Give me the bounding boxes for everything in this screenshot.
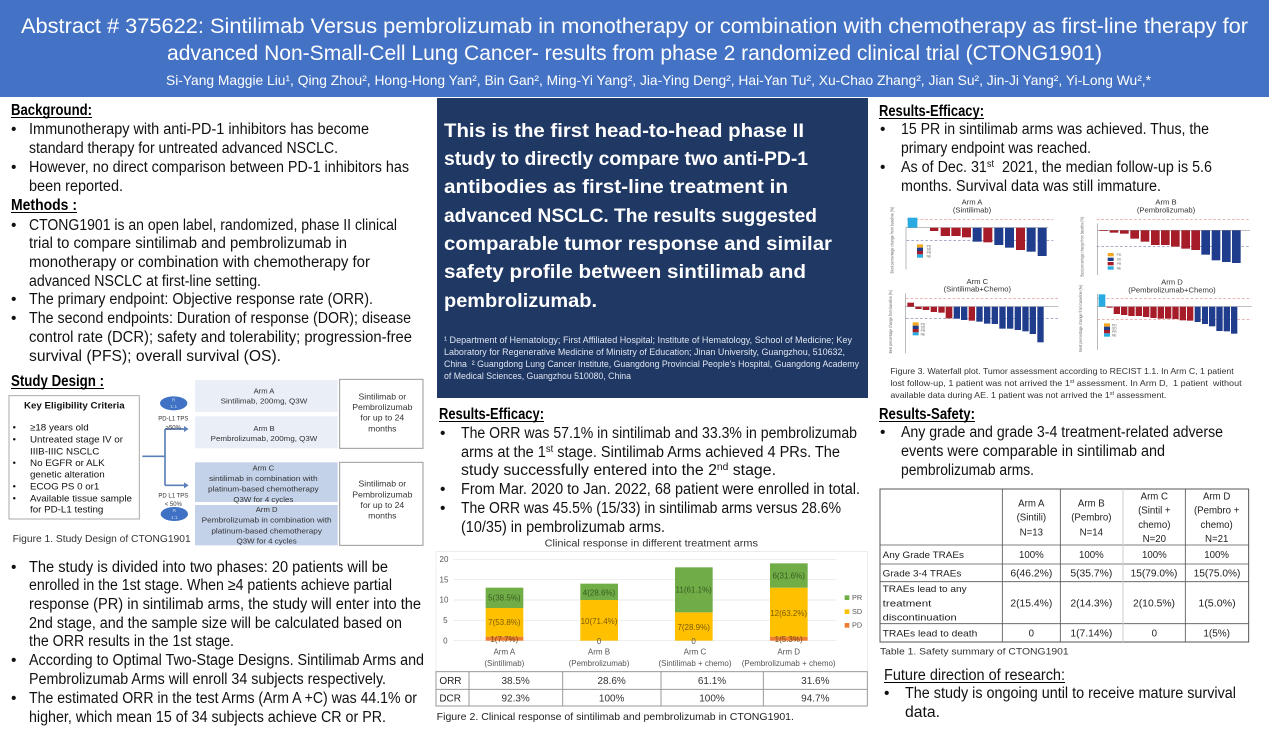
eligibility criteria box: • bbox=[13, 423, 16, 433]
text block: study phases: 2nd stage, and the sample size will be calculated based on bbox=[29, 615, 402, 632]
text block: study phases: According to Optimal Two-Stage Designs. Sintilimab Arms and bbox=[29, 652, 424, 669]
bar: arm B: Arm B bbox=[588, 648, 610, 657]
table header: (Sintil + bbox=[1138, 505, 1171, 516]
row: death: 1(5%) bbox=[1203, 628, 1230, 639]
arm C box: platinum-based chemotherapy bbox=[208, 485, 319, 494]
text block: results safety: Any grade and grade 3-4 treatment-related adverse bbox=[901, 424, 1223, 441]
waterfall: arm B: PR bbox=[1117, 262, 1122, 266]
waterfall: arm D: SD bbox=[1112, 327, 1117, 331]
row: grade 3-4: Grade 3-4 TRAEs bbox=[883, 568, 962, 578]
bar: arm C bbox=[658, 567, 732, 668]
waterfall: arm C: Best percentage change from baseline (%) bbox=[888, 290, 893, 353]
bar: arm C: Arm C bbox=[684, 648, 707, 657]
text block: results efficacy middle: study successfully entered into the 2 bbox=[461, 462, 711, 479]
row: any grade: 100% bbox=[1019, 550, 1044, 561]
arm D box: Pembrolizumab in combination with bbox=[202, 516, 332, 525]
text block: methods: The second endpoints: Duration of response (DOR); disease bbox=[29, 310, 411, 327]
waterfall: arm A: Arm A bbox=[962, 198, 983, 207]
conclusion statement: study to directly compare two anti-PD-1 bbox=[444, 148, 808, 170]
bar: arm C: 11(61.1%) bbox=[676, 586, 712, 595]
text block: study phases bbox=[11, 559, 424, 726]
affiliations: of Medical Sciences, Guangzhou 510080, China bbox=[444, 371, 632, 382]
bar: arm D: Arm D bbox=[777, 648, 800, 657]
caption: figure 3: st bbox=[1110, 391, 1115, 397]
maintenance box bottom: for up to 24 bbox=[360, 500, 404, 510]
text block: study phases: Pembrolizumab Arms will enroll 34 subjects respectively. bbox=[29, 671, 386, 688]
affiliations: China ² Guangdong Lung Cancer Institute, Guangdong Provincial People's Hospital, Guangdong Academy bbox=[444, 359, 859, 370]
row: grade 3-4: 15(79.0%) bbox=[1131, 568, 1177, 579]
table: ORR and DCR: 100% bbox=[599, 694, 625, 705]
waterfall: arm C: NE bbox=[921, 332, 926, 336]
text block: methods: control rate (DCR); safety and tolerability; progression-free bbox=[29, 329, 412, 346]
row: discontinuation bbox=[883, 584, 1236, 623]
eligibility criteria box: • bbox=[13, 493, 16, 503]
row: any grade: Any Grade TRAEs bbox=[883, 550, 964, 560]
text block: methods: trial to compare sintilimab and pembrolizumab in bbox=[29, 235, 347, 252]
table: ORR and DCR: 100% bbox=[699, 694, 725, 705]
diagram: study design bbox=[9, 379, 423, 546]
randomization ovals: R bbox=[172, 397, 176, 403]
conclusion statement: This is the first head-to-head phase II bbox=[444, 120, 804, 142]
row: discontinuation: TRAEs lead to any bbox=[883, 584, 967, 594]
maintenance box top: Sintilimab or bbox=[359, 392, 406, 402]
axis labels: 10 bbox=[440, 596, 449, 605]
legend: PR bbox=[852, 593, 862, 602]
maintenance box bottom: months bbox=[368, 511, 397, 521]
text block: results efficacy middle: Results-Efficacy: bbox=[439, 406, 544, 423]
title: Abstract # 375622: Sintilimab Versus pembrolizumab in monotherapy or combination with chemotherapy as first-line therapy for bbox=[21, 15, 1248, 38]
bar: arm D bbox=[742, 563, 836, 668]
axis labels: 15 bbox=[440, 575, 449, 584]
table: ORR and DCR: DCR bbox=[439, 694, 461, 705]
maintenance box top: Pembrolizumab bbox=[352, 402, 413, 412]
row: death bbox=[883, 628, 1230, 639]
table header: (Pembro) bbox=[1071, 513, 1111, 524]
title: advanced Non-Small-Cell Lung Cancer- results from phase 2 randomized clinical trial (CTONG1901) bbox=[167, 42, 1102, 65]
text block: results efficacy right: • bbox=[880, 121, 885, 138]
eligibility criteria box: No EGFR or ALK bbox=[30, 458, 105, 468]
text block: results efficacy right: 2021, the median follow-up is 5.6 bbox=[994, 159, 1212, 176]
waterfall: arm C: SD bbox=[921, 326, 926, 330]
arm B box: Pembrolizumab, 200mg, Q3W bbox=[211, 434, 318, 443]
maintenance box bottom: Sintilimab or bbox=[359, 479, 406, 489]
eligibility criteria box: • bbox=[13, 481, 16, 491]
text block: study phases: • bbox=[11, 559, 16, 576]
text block: study phases: • bbox=[11, 690, 16, 707]
text block: results efficacy right: • bbox=[880, 159, 885, 176]
row: death: 1(7.14%) bbox=[1070, 628, 1112, 639]
text block: study phases: response (PR) in sintilimab arms, the study will enter into the bbox=[29, 596, 421, 613]
text block: results efficacy middle: nd bbox=[717, 462, 728, 473]
text block: methods: Methods : bbox=[11, 197, 77, 214]
bar: arm C: 7(28.9%) bbox=[677, 623, 710, 632]
waterfall: arm D: PR bbox=[1112, 330, 1117, 334]
text block: methods: monotherapy or combination with chemotherapy for bbox=[29, 254, 370, 271]
text block: results efficacy middle: • bbox=[440, 500, 445, 517]
row: discontinuation: 1(5.0%) bbox=[1198, 599, 1236, 610]
row: grade 3-4: 15(75.0%) bbox=[1194, 568, 1240, 579]
text block: background: • bbox=[11, 159, 16, 176]
text block: results efficacy middle: (10/35) in pembrolizumab arms. bbox=[461, 519, 665, 536]
waterfall: arm C: Arm C bbox=[966, 277, 989, 286]
table: ORR and DCR: ORR bbox=[439, 676, 462, 687]
affiliations: ¹ Department of Hematology; First Affiliated Hospital; Institute of Hematology, School of Medicine; Key bbox=[444, 335, 852, 346]
text block: study phases: • bbox=[11, 652, 16, 669]
table: ORR and DCR: 31.6% bbox=[801, 676, 830, 687]
arm C box: Q3W for 4 cycles bbox=[233, 495, 293, 504]
caption: table 1: Table 1. Safety summary of CTONG1901 bbox=[880, 646, 1069, 656]
waterfall: arm A: NE bbox=[927, 254, 932, 258]
waterfall: arm D: Arm D bbox=[1161, 278, 1183, 287]
text block: results efficacy middle: The ORR was 45.5% (15/33) in sintilimab arms versus 28.6% bbox=[461, 500, 841, 517]
eligibility criteria box: for PD-L1 testing bbox=[30, 505, 103, 515]
eligibility criteria box: IIIB-IIIC NSCLC bbox=[30, 446, 100, 456]
conclusion statement: pembrolizumab. bbox=[444, 290, 597, 312]
title bbox=[21, 15, 1248, 65]
text block: study phases: the ORR results in the 1st stage. bbox=[29, 633, 234, 650]
bar: arm D: (Pembrolizumab + chemo) bbox=[742, 659, 836, 668]
randomization ovals: PD-L1 TPS bbox=[158, 417, 188, 423]
arm D box: Arm D bbox=[256, 505, 278, 514]
text block: study phases: higher, which mean 15 of 34 subjects achieve CR or PR. bbox=[29, 709, 386, 726]
table: ORR and DCR: 92.3% bbox=[502, 694, 530, 705]
bar: arm C: 0 bbox=[691, 637, 696, 646]
text block: results efficacy middle bbox=[439, 406, 860, 536]
text block: future direction: The study is ongoing until to receive mature survival bbox=[905, 685, 1236, 702]
waterfall: arm D bbox=[1078, 278, 1252, 352]
chart: clinical response stacked bars bbox=[436, 538, 867, 723]
bar: arm D: 1(5.3%) bbox=[775, 635, 803, 644]
axis labels: 0 bbox=[443, 636, 448, 645]
row: death: 0 bbox=[1152, 628, 1157, 639]
authors: Si-Yang Maggie Liu¹, Qing Zhou², Hong-Hong Yan², Bin Gan², Ming-Yi Yang², Jia-Ying Deng², Hai-Yan Tu², Xu-Chao Zhang², Jian Su², Jin-Ji Yang², Yi-Long Wu²,* bbox=[166, 72, 1152, 88]
eligibility criteria box: Untreated stage IV or bbox=[30, 435, 123, 445]
axis labels: 5 bbox=[443, 616, 448, 625]
axis labels: 20 bbox=[440, 555, 449, 564]
text block: future direction: data. bbox=[905, 704, 940, 721]
row: grade 3-4 bbox=[883, 568, 1240, 579]
caption: figure 1: Figure 1. Study Design of CTONG1901 bbox=[13, 534, 191, 545]
eligibility criteria box: ECOG PS 0 or1 bbox=[30, 481, 99, 491]
eligibility criteria box: • bbox=[13, 458, 16, 468]
panel: key conclusion bbox=[437, 98, 868, 398]
table header: chemo) bbox=[1138, 520, 1170, 531]
text block: future direction: • bbox=[884, 685, 889, 702]
arm B box: Arm B bbox=[253, 424, 275, 433]
table header: N=20 bbox=[1143, 534, 1166, 545]
conclusion statement: comparable tumor response and similar bbox=[444, 233, 832, 255]
header banner bbox=[0, 0, 1269, 97]
bar: arm A bbox=[484, 588, 525, 668]
maintenance box top: months bbox=[368, 423, 397, 433]
eligibility criteria box bbox=[9, 396, 139, 519]
eligibility criteria box: genetic alteration bbox=[30, 470, 105, 480]
text block: results efficacy middle: The ORR was 57.1% in sintilimab and 33.3% in pembrolizumab bbox=[461, 425, 857, 442]
arm A box: Arm A bbox=[254, 386, 275, 395]
arm A box: Sintilimab, 200mg, Q3W bbox=[221, 396, 308, 405]
waterfall: arm A: PD bbox=[927, 244, 932, 248]
conclusion statement: safety profile between sintilimab and bbox=[444, 261, 806, 283]
waterfall: arm C: (Sintilimab+Chemo) bbox=[944, 285, 1011, 294]
text block: results efficacy middle: stage. Sintilimab Arms achieved 4 PRs. The bbox=[553, 444, 840, 461]
maintenance box bottom: Pembrolizumab bbox=[352, 489, 413, 499]
chart title: Clinical response in different treatment arms bbox=[545, 538, 758, 549]
waterfall: arm B bbox=[1079, 198, 1250, 277]
waterfall: arm B: Arm B bbox=[1155, 198, 1177, 207]
table header: N=21 bbox=[1205, 534, 1228, 545]
legend: SD bbox=[852, 607, 862, 616]
heading: study design: Study Design : bbox=[11, 373, 104, 390]
table header: N=14 bbox=[1080, 527, 1104, 538]
text block: results efficacy right: primary endpoint was reached. bbox=[901, 140, 1091, 157]
text block: results efficacy right: As of Dec. 31 bbox=[901, 159, 994, 176]
bar: arm A: 5(38.5%) bbox=[488, 594, 521, 603]
caption: figure 3: assessment. In Arm D, 1 patient without bbox=[1074, 378, 1242, 388]
text block: results efficacy right: months. Survival data was still immature. bbox=[901, 178, 1161, 195]
text block: results safety: • bbox=[880, 424, 885, 441]
caption: figure 3 bbox=[890, 366, 1242, 400]
caption: figure 3: Figure 3. Waterfall plot. Tumor assessment according to RECIST 1.1. In Arm C, 1 patient bbox=[890, 366, 1234, 376]
text block: results efficacy middle: • bbox=[440, 481, 445, 498]
table: ORR and DCR: 28.6% bbox=[598, 676, 626, 687]
legend: PD bbox=[852, 621, 862, 630]
bar: arm C: (Sintilimab + chemo) bbox=[658, 659, 732, 668]
waterfall: arm D: NE bbox=[1112, 333, 1117, 337]
row: discontinuation: treatment bbox=[883, 599, 932, 609]
bar: arm B: (Pembrolizumab) bbox=[569, 659, 630, 668]
row: discontinuation: 2(14.3%) bbox=[1070, 599, 1112, 610]
maintenance box bottom bbox=[340, 462, 423, 545]
maintenance box top: for up to 24 bbox=[360, 413, 404, 423]
text block: methods: The primary endpoint: Objective response rate (ORR). bbox=[29, 291, 373, 308]
text block: results safety: pembrolizumab arms. bbox=[901, 462, 1034, 479]
eligibility criteria box: ≥18 years old bbox=[30, 423, 89, 433]
axis labels bbox=[440, 555, 449, 645]
conclusion statement bbox=[444, 120, 832, 312]
text block: results efficacy right bbox=[879, 103, 1212, 195]
text block: background: Immunotherapy with anti-PD-1 inhibitors has become bbox=[29, 121, 369, 138]
text block: results efficacy right: 15 PR in sintilimab arms was achieved. Thus, the bbox=[901, 121, 1209, 138]
arm C box: Arm C bbox=[252, 463, 275, 472]
text block: study phases: The study is divided into two phases: 20 patients will be bbox=[29, 559, 388, 576]
waterfall: arm C: PD bbox=[921, 322, 926, 326]
caption: figure 3: assessment. bbox=[1114, 390, 1166, 400]
text block: background: been reported. bbox=[29, 178, 123, 195]
text block: methods: advanced NSCLC at first-line setting. bbox=[29, 273, 261, 290]
text block: results efficacy middle: stage. bbox=[728, 462, 776, 479]
waterfall: arm B: PD bbox=[1117, 253, 1122, 257]
row: any grade: 100% bbox=[1079, 550, 1104, 561]
table header: (Sintili) bbox=[1017, 513, 1046, 524]
waterfall: arm A: Best percentage change from baseline (%) bbox=[889, 206, 894, 273]
text block: results efficacy right: st bbox=[987, 159, 994, 170]
text block: results efficacy middle: From Mar. 2020 to Jan. 2022, 68 patient were enrolled in total. bbox=[461, 481, 860, 498]
text block: background: However, no direct comparison between PD-1 inhibitors has bbox=[29, 159, 409, 176]
text block: methods: • bbox=[11, 310, 16, 327]
waterfall: arm B: SD bbox=[1117, 258, 1122, 262]
randomization ovals bbox=[158, 396, 188, 521]
waterfall: arm D: (Pembrolizumab+Chemo) bbox=[1128, 285, 1216, 294]
randomization ovals: 1:1 bbox=[171, 515, 178, 521]
bar: arm B: 10(71.4%) bbox=[581, 617, 618, 626]
table header: (Pembro + bbox=[1194, 505, 1240, 516]
table: ORR and DCR: 38.5% bbox=[502, 676, 530, 687]
eligibility criteria box: • bbox=[13, 435, 16, 445]
text block: methods: • bbox=[11, 291, 16, 308]
text block: background bbox=[11, 102, 409, 195]
caption: figure 3: st bbox=[1070, 379, 1075, 385]
eligibility criteria box: Key Eligibility Criteria bbox=[24, 401, 126, 411]
text block: background: standard therapy for untreated advanced NSCLC. bbox=[29, 140, 338, 157]
arm D box bbox=[195, 505, 338, 546]
row: discontinuation: discontinuation bbox=[883, 613, 957, 623]
randomization ovals: ≥50% bbox=[166, 425, 182, 431]
text block: background: • bbox=[11, 121, 16, 138]
randomization ovals: < 50% bbox=[165, 502, 183, 508]
arm B box bbox=[195, 416, 338, 448]
waterfall: arm B: NE bbox=[1117, 266, 1122, 270]
table: ORR and DCR bbox=[436, 672, 867, 706]
text block: results efficacy middle: • bbox=[440, 425, 445, 442]
text block: methods: survival (PFS); overall survival (OS). bbox=[29, 348, 281, 365]
text block: future direction: Future direction of research: bbox=[884, 667, 1065, 684]
maintenance box top bbox=[340, 379, 423, 448]
text block: results efficacy middle: arms at the 1 bbox=[461, 444, 551, 461]
table header: Arm B bbox=[1078, 499, 1105, 510]
text block: study phases: enrolled in the 1st stage. When ≥4 patients achieve partial bbox=[29, 577, 392, 594]
bar: arm A: (Sintilimab) bbox=[484, 659, 525, 668]
table header bbox=[1017, 491, 1240, 545]
text block: study phases: The estimated ORR in the test Arms (Arm A +C) was 44.1% or bbox=[29, 690, 417, 707]
text block: background: Background: bbox=[11, 102, 92, 119]
waterfall: arm A: PR bbox=[927, 251, 932, 255]
bar: arm B: 4(28.6%) bbox=[583, 588, 616, 597]
text block: methods: CTONG1901 is an open label, randomized, phase II clinical bbox=[29, 217, 397, 234]
table: safety summary bbox=[880, 489, 1249, 656]
legend bbox=[845, 593, 862, 630]
conclusion statement: antibodies as first-line treatment in bbox=[444, 176, 788, 198]
text block: results safety: events were comparable in sintilimab and bbox=[901, 443, 1165, 460]
row: grade 3-4: 6(46.2%) bbox=[1010, 568, 1052, 579]
bar: arm D: 6(31.6%) bbox=[772, 572, 805, 581]
waterfall: arm A: (Sintilimab) bbox=[953, 205, 992, 214]
table header: N=13 bbox=[1020, 527, 1043, 538]
row: any grade bbox=[883, 550, 1229, 561]
waterfall: arm A bbox=[889, 198, 1053, 273]
row: discontinuation: 2(10.5%) bbox=[1133, 599, 1175, 610]
waterfall: arm C: PR bbox=[921, 329, 926, 333]
text block: methods bbox=[11, 197, 412, 365]
arm D box: Q3W for 4 cycles bbox=[237, 537, 297, 546]
row: any grade: 100% bbox=[1204, 550, 1229, 561]
chart: waterfall plots bbox=[888, 198, 1252, 400]
bar: arm A: 1(7.7%) bbox=[490, 635, 519, 644]
waterfall: arm A: SD bbox=[927, 248, 932, 252]
bar: arm A: 7(53.8%) bbox=[488, 618, 521, 627]
arm C box: sintilimab in combination with bbox=[209, 474, 318, 483]
randomization ovals: R bbox=[173, 508, 177, 514]
row: any grade: 100% bbox=[1142, 550, 1167, 561]
text block: methods: • bbox=[11, 217, 16, 234]
table header: Arm D bbox=[1203, 491, 1230, 502]
arm A box bbox=[195, 380, 338, 412]
waterfall: arm B: Best percentage change from baseline (%) bbox=[1079, 216, 1084, 277]
bar: arm B bbox=[569, 584, 630, 668]
text block: results safety bbox=[879, 406, 1223, 479]
caption: figure 3: available data during AE. 1 patient was not arrived the 1 bbox=[890, 390, 1104, 400]
text block: results efficacy middle: st bbox=[546, 444, 553, 455]
conclusion statement: advanced NSCLC. The results suggested bbox=[444, 205, 817, 227]
arm D box: platinum-based chemotherapy bbox=[211, 526, 322, 535]
arrows: randomization branches bbox=[142, 426, 189, 488]
caption: figure 2: Figure 2. Clinical response of sintilimab and pembrolizumab in CTONG1901. bbox=[437, 712, 794, 723]
bar: arm A: Arm A bbox=[493, 648, 516, 657]
waterfall: arm C bbox=[888, 277, 1058, 353]
waterfall: arm D: PD bbox=[1112, 323, 1117, 327]
table: ORR and DCR: 61.1% bbox=[698, 676, 726, 687]
text block: future direction bbox=[884, 667, 1236, 721]
row: death: TRAEs lead to death bbox=[883, 628, 977, 638]
row: death: 0 bbox=[1029, 628, 1034, 639]
table header: Arm C bbox=[1141, 491, 1168, 502]
arm C box bbox=[195, 462, 338, 504]
table header: Arm A bbox=[1018, 499, 1045, 510]
table: ORR and DCR: 94.7% bbox=[801, 694, 830, 705]
row: discontinuation: 2(15.4%) bbox=[1010, 599, 1052, 610]
affiliations: Laboratory for Regenerative Medicine of Ministry of Education; Jinan University, Guangzhou, 510632, bbox=[444, 347, 845, 358]
randomization ovals: 1:1 bbox=[170, 404, 177, 410]
text block: results safety: Results-Safety: bbox=[879, 406, 975, 423]
waterfall: arm B: (Pembrolizumab) bbox=[1137, 205, 1196, 214]
caption: figure 3: lost follow-up, 1 patient was not arrived the 1 bbox=[890, 378, 1062, 388]
bar: arm B: 0 bbox=[597, 637, 602, 646]
waterfall: arm D: Best percentage change from baseline (%) bbox=[1078, 285, 1083, 352]
row: grade 3-4: 5(35.7%) bbox=[1070, 568, 1112, 579]
eligibility criteria box: Available tissue sample bbox=[30, 493, 132, 503]
text block: results efficacy right: Results-Efficacy: bbox=[879, 103, 984, 120]
randomization ovals: PD L1 TPS bbox=[158, 493, 188, 499]
bar: arm D: 12(63.2%) bbox=[770, 609, 807, 618]
table header: chemo) bbox=[1201, 520, 1233, 531]
affiliations bbox=[444, 335, 859, 382]
